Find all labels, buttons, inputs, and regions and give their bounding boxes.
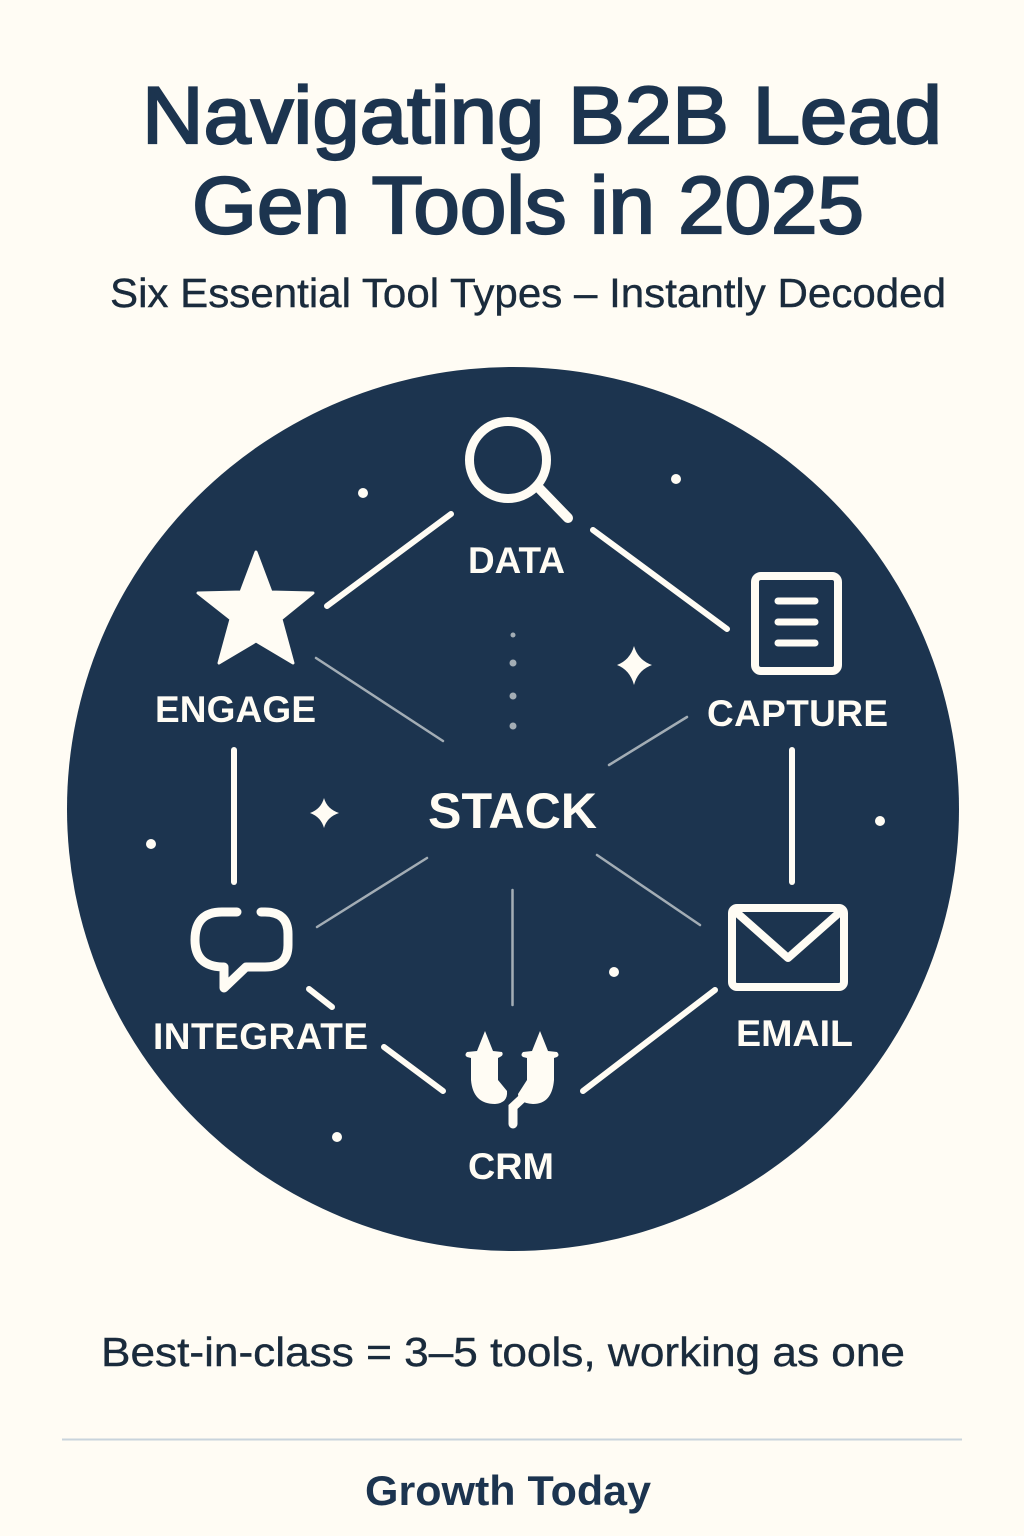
label: INTEGRATE: INTEGRATE [153,1016,368,1057]
icon: envelope [732,908,844,987]
subtitle: Six Essential Tool Types – Instantly Decoded [110,270,946,316]
title: Gen Tools in 2025 [192,161,864,251]
icon: star [198,552,313,663]
icon: CRM handshake plugs [466,1031,558,1124]
label: DATA: DATA [468,540,565,581]
connectors: spokes to centre [316,658,700,1005]
icon: sparkle left [310,798,339,828]
decorative dots [146,474,885,1142]
icon: sparkle right [617,646,652,685]
label: EMAIL: EMAIL [736,1013,853,1054]
footer brand: Growth Today [365,1467,652,1514]
icon: magnifier [470,422,568,518]
icon: document [755,576,838,671]
panel: stack circle [67,367,959,1251]
title: Navigating B2B Lead [142,71,942,161]
title [142,71,942,251]
dotted spoke [510,632,516,730]
label: CAPTURE: CAPTURE [707,693,888,734]
label: ENGAGE: ENGAGE [155,689,316,730]
centre label: STACK: STACK [428,783,597,839]
icon: chat bubble [195,912,288,988]
tagline: Best-in-class = 3–5 tools, working as one [101,1329,905,1375]
connectors: outer ring [234,514,792,1091]
label: CRM: CRM [468,1146,554,1187]
